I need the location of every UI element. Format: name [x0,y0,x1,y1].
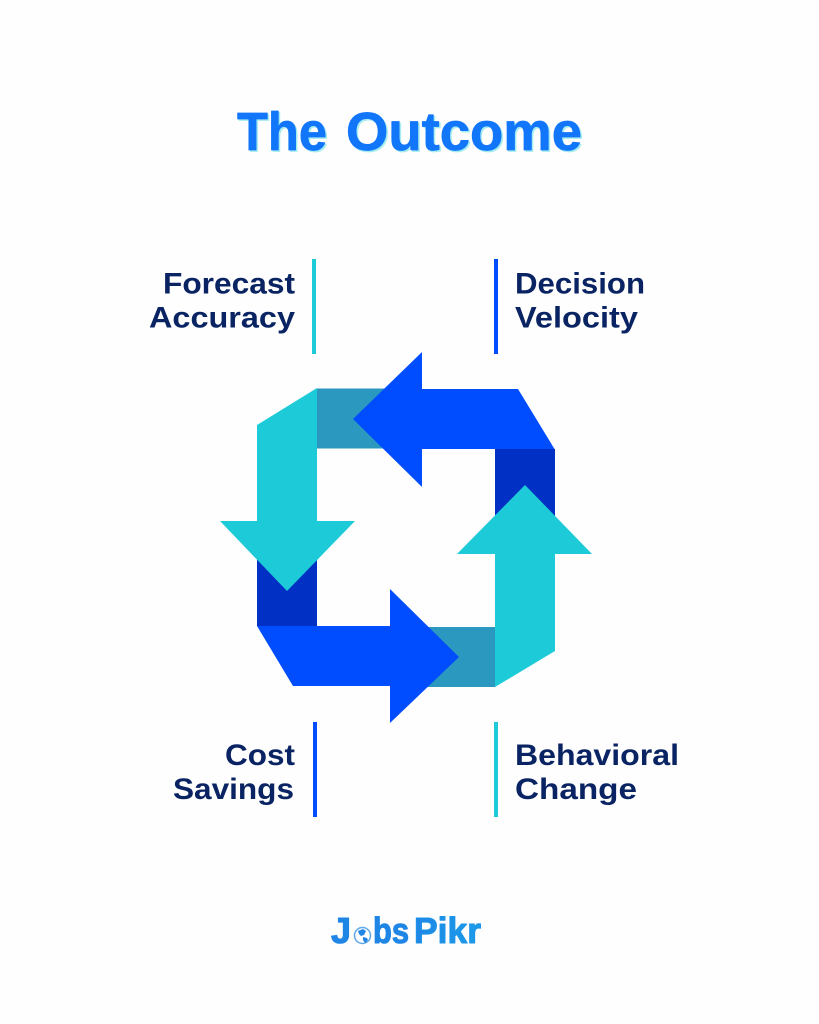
label: Decision Velocity: Velocity [515,302,638,334]
logo: JobsPikr: J [331,910,351,951]
cycle diagram [220,352,592,723]
label: Decision Velocity: Decision [515,268,645,300]
logo: JobsPikr [331,910,481,951]
arrow: blue pointing left [353,352,554,487]
label: Forecast Accuracy: Forecast [163,268,295,300]
arrow: teal pointing up [457,485,592,687]
connector: bottom teal-blue band [425,627,495,687]
title: The Outcome: The [237,103,327,162]
label: Cost Savings [173,739,295,806]
label: Behavioral Change: Behavioral [515,739,679,772]
title: The Outcome: The [238,104,328,164]
title: The Outcome: Outcome [346,103,582,162]
icon: globe [354,928,370,944]
connector: top teal-blue band [317,388,407,448]
logo: JobsPikr: Pikr [414,910,481,951]
title: The Outcome: Outcome [348,104,584,164]
label: Behavioral Change: Change [515,773,637,806]
title: The Outcome [237,103,584,164]
divider: Forecast Accuracy [312,259,316,354]
divider: Cost Savings [313,722,317,817]
arrow: blue pointing right [257,589,459,723]
label: Cost Savings: Cost [225,739,295,772]
arrow: teal pointing down [220,388,355,591]
divider: Behavioral Change [494,722,498,817]
divider: Decision Velocity [494,259,498,354]
label: Behavioral Change [515,739,679,806]
connector: right dark blue band [495,449,555,524]
label: Decision Velocity [515,268,645,334]
label: Cost Savings: Savings [173,773,294,806]
label: Forecast Accuracy: Accuracy [149,302,295,334]
connector: left dark blue band [257,552,317,626]
label: Forecast Accuracy [149,268,295,334]
logo: JobsPikr: bs [373,910,409,951]
